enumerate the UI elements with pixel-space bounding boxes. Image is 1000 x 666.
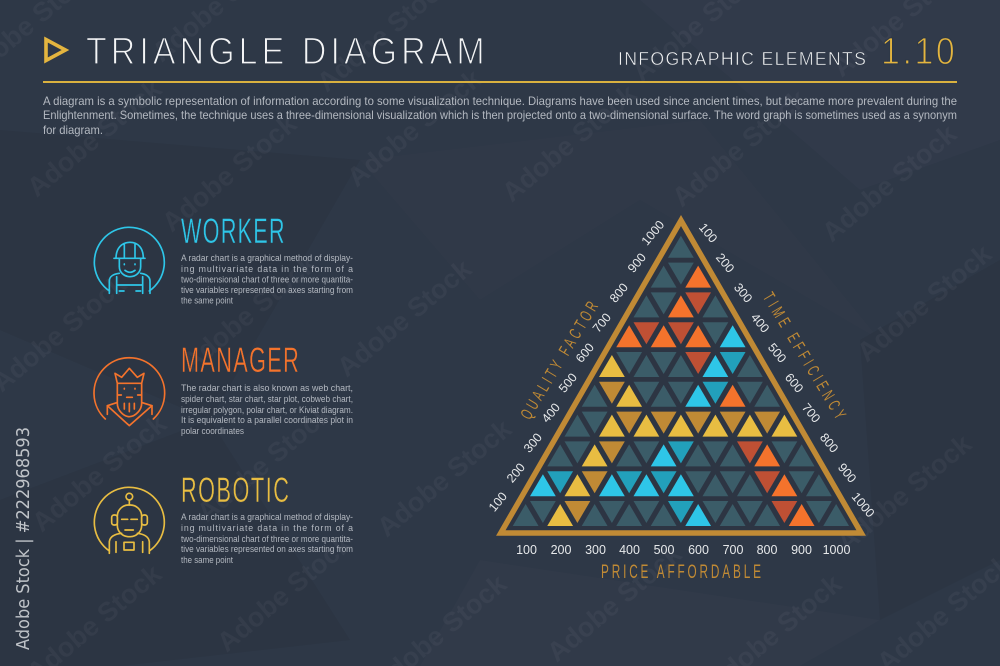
text: robotic description: the same point <box>181 555 233 565</box>
left axis numbers: 100 <box>486 489 510 514</box>
text: Adobe Stock <box>331 253 478 383</box>
left axis numbers: 700 <box>590 310 614 335</box>
left axis numbers: 500 <box>556 370 580 395</box>
text: Adobe Stock <box>191 398 338 528</box>
text: Adobe Stock <box>371 413 518 543</box>
icon: manager <box>94 358 165 426</box>
stock credit: Adobe Stock | #222968593 <box>13 427 34 650</box>
text: robotic description <box>181 512 353 565</box>
triangle cell grid <box>513 236 849 526</box>
bottom axis numbers: 300 <box>585 543 606 557</box>
heading: manager: MANAGER <box>181 342 299 380</box>
axis title: time efficiency: TIME EFFICIENCY <box>759 289 850 423</box>
text: worker description: tive variables represented on axes starting from <box>181 285 353 295</box>
text: Adobe Stock <box>541 538 688 666</box>
right axis numbers <box>696 221 877 520</box>
bottom axis numbers: 100 <box>516 543 537 557</box>
triangle outline <box>501 220 861 533</box>
text: robotic description: A radar chart is a graphical method of display- <box>181 512 353 522</box>
text: manager description: It is equivalent to a parallel coordinates plot in <box>181 415 353 425</box>
text: Adobe Stock <box>156 108 303 238</box>
bottom axis numbers: 700 <box>723 543 743 557</box>
right axis numbers: 500 <box>765 341 789 366</box>
text: robotic description: ing multivariate data in the form of a <box>181 523 353 533</box>
bottom axis numbers: 400 <box>619 543 640 557</box>
axis title: quality factor: QUALITY FACTOR <box>516 298 602 423</box>
text: Adobe Stock <box>851 238 998 368</box>
bottom axis numbers: 1000 <box>823 543 850 557</box>
chart: ternary triangle diagram <box>486 218 877 583</box>
intro paragraph: for diagram. <box>43 123 103 137</box>
right axis numbers: 400 <box>748 311 772 336</box>
intro paragraph <box>43 94 957 137</box>
icon: title play triangle <box>46 40 66 60</box>
left axis numbers: 300 <box>521 430 545 455</box>
right axis numbers: 700 <box>799 401 823 426</box>
left axis numbers: 200 <box>504 460 528 485</box>
text: Adobe Stock <box>341 63 488 193</box>
heading: worker: WORKER <box>181 213 285 251</box>
left axis numbers: 600 <box>573 340 597 365</box>
left axis numbers <box>486 218 667 514</box>
right axis numbers: 1000 <box>849 490 877 520</box>
text: worker description: A radar chart is a graphical method of display- <box>181 253 353 263</box>
text: manager description: polar coordinates <box>181 426 245 436</box>
text: robotic description: tive variables represented on axes starting from <box>181 544 353 554</box>
icon: robotic <box>94 487 164 553</box>
subtitle: INFOGRAPHIC ELEMENTS <box>618 49 866 69</box>
axis title: price affordable: PRICE AFFORDABLE <box>601 562 761 583</box>
panel: manager <box>94 342 353 436</box>
left axis numbers: 400 <box>539 400 563 425</box>
icon: worker <box>94 227 164 293</box>
left axis numbers: 800 <box>607 280 631 305</box>
header rule <box>43 81 957 83</box>
text: Adobe Stock <box>816 118 963 248</box>
bottom axis numbers: 600 <box>688 543 709 557</box>
bottom axis numbers: 800 <box>757 543 777 557</box>
text: Adobe Stock <box>666 83 813 213</box>
text: Adobe Stock <box>21 73 168 203</box>
bottom axis numbers: 200 <box>551 543 571 557</box>
heading: robotic: ROBOTIC <box>181 472 289 510</box>
right axis numbers: 200 <box>713 251 737 276</box>
bottom axis numbers <box>516 543 850 557</box>
title: TRIANGLE DIAGRAM <box>86 30 485 72</box>
text: Adobe Stock <box>176 248 323 378</box>
text: worker description: the same point <box>181 296 233 306</box>
bottom axis numbers: 500 <box>654 543 674 557</box>
text: manager description: irregular polygon, polar chart, or Kiviat diagram. <box>181 405 353 415</box>
intro paragraph: A diagram is a symbolic representation of information according to some visualization technique. Diagrams have been used since ancient times, but became more prevalent during the <box>43 94 957 108</box>
panel: worker <box>94 213 353 306</box>
text: worker description: two-dimensional chart of three or more quantita- <box>181 274 353 284</box>
text: Adobe Stock <box>211 528 358 658</box>
panel: robotic <box>94 472 353 565</box>
right axis numbers: 300 <box>731 281 755 306</box>
left axis numbers: 1000 <box>639 218 667 248</box>
right axis numbers: 600 <box>782 371 806 396</box>
text: robotic description: two-dimensional chart of three or more quantita- <box>181 534 353 544</box>
text: Adobe Stock <box>496 78 643 208</box>
text: manager description: The radar chart is also known as web chart, <box>181 383 353 393</box>
text: worker description <box>181 253 353 306</box>
text: Adobe Stock <box>831 428 978 558</box>
right axis numbers: 800 <box>817 431 841 456</box>
text: worker description: ing multivariate data in the form of a <box>181 264 353 274</box>
text: Adobe Stock <box>26 408 173 538</box>
text: manager description <box>181 383 353 436</box>
left axis numbers: 900 <box>625 250 649 275</box>
right axis numbers: 900 <box>835 461 859 486</box>
bottom axis numbers: 900 <box>791 543 812 557</box>
right axis numbers: 100 <box>696 221 720 246</box>
text: manager description: spider chart, star chart, star plot, cobweb chart, <box>181 394 353 404</box>
version number: 1.10 <box>881 30 955 72</box>
